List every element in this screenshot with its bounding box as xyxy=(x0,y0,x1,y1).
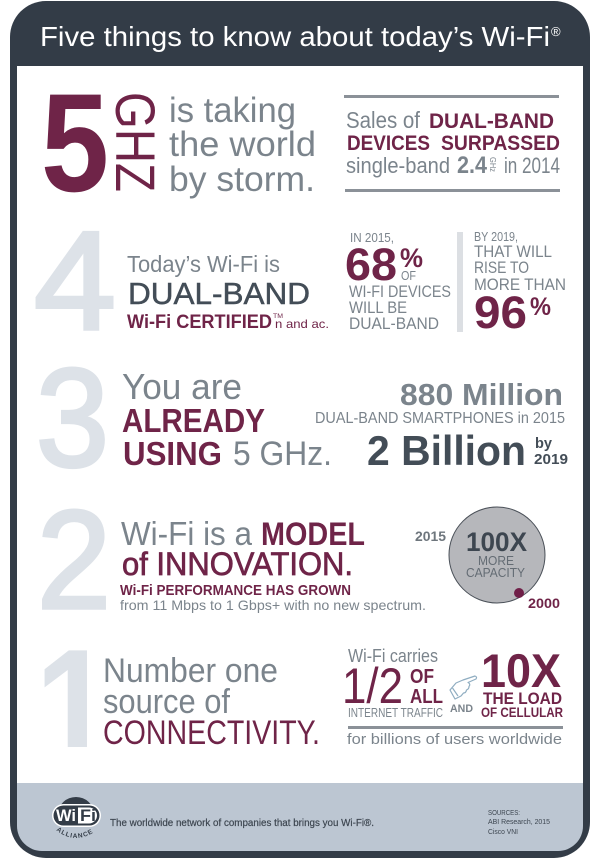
section 4 stat: 96%: RISE TO xyxy=(474,258,529,277)
section 4 stat: 96%: THAT WILL xyxy=(474,242,552,261)
section 1 heading: source of xyxy=(103,683,230,721)
section 2 heading xyxy=(37,481,426,638)
section 2 heading: 2 xyxy=(37,481,111,638)
section 4 stat: 68%: OF xyxy=(401,268,416,283)
and label: AND xyxy=(450,703,473,715)
section 2 heading: from 11 Mbps to 1 Gbps+ with no new spectrum. xyxy=(120,597,426,613)
section 2 heading: MODEL xyxy=(261,516,365,552)
section 1 stat: ten times cellular: THE LOAD xyxy=(483,689,562,708)
section 2 chart: capacity circle xyxy=(415,507,560,611)
section 1 stat: half of internet traffic: OF xyxy=(410,666,434,688)
section 4 heading: Wi-Fi CERTIFIED xyxy=(127,312,272,333)
section 4 stat: 68%: WI-FI DEVICES xyxy=(349,282,451,301)
section 1 heading: Number one xyxy=(103,652,278,690)
icon: Wi-Fi Alliance logo: Wi xyxy=(56,806,76,825)
section 4 stat: 96% xyxy=(474,230,566,338)
section 5 heading: is taking xyxy=(169,91,296,130)
section 5 callout: sales: in 2014 xyxy=(504,153,560,178)
section 1 stat: ten times cellular xyxy=(481,644,563,720)
section 4 heading xyxy=(34,202,329,359)
section 3 heading: USING xyxy=(123,435,222,472)
title: Five things to know about today’s Wi-Fi xyxy=(40,21,550,52)
section 5 callout: sales: Sales of xyxy=(346,107,421,133)
section 2 heading: of INNOVATION. xyxy=(122,546,353,582)
footer sources: SOURCES: xyxy=(488,810,520,817)
section 1 stat: ten times cellular: OF CELLULAR xyxy=(481,704,563,720)
section 3 stats: smartphones: by xyxy=(535,435,553,452)
section 1 stat: half of internet traffic: INTERNET TRAFFIC xyxy=(348,705,443,720)
section 1 stat: half of internet traffic: ALL xyxy=(410,686,443,708)
footer sources xyxy=(488,810,550,836)
section 4 heading: 4 xyxy=(34,202,116,359)
section 5 callout: sales: single-band xyxy=(346,153,450,178)
section 1 stat: half of internet traffic xyxy=(342,646,443,720)
section 5 callout: sales: 2.4 xyxy=(457,152,488,179)
section 1 heading: 1 xyxy=(35,614,113,802)
section 5 heading: the world xyxy=(169,125,316,164)
section 4 stat: 96%: MORE THAN xyxy=(474,275,566,294)
section 3 heading: 3 xyxy=(36,339,109,496)
section 3 stats: smartphones: 2 Billion xyxy=(367,427,526,474)
footer sources: ABI Research, 2015 xyxy=(488,819,550,826)
section 1 stat: half of internet traffic: 1/2 xyxy=(342,658,403,714)
section 5 heading: 5 xyxy=(41,64,109,221)
section 2 chart: capacity circle: 100X xyxy=(466,527,527,557)
icon: Wi-Fi Alliance logo xyxy=(52,797,101,838)
section 4 stat: 68%: % xyxy=(400,243,423,273)
section 2 heading: Wi-Fi PERFORMANCE HAS GROWN xyxy=(120,582,351,599)
section 1 stat: ten times cellular: 10X xyxy=(481,644,561,697)
section 2 chart: capacity circle: 2015 xyxy=(415,529,446,544)
section 1 stat: half of internet traffic: Wi-Fi carries xyxy=(348,646,438,666)
icon: pointing hand xyxy=(450,676,477,699)
section 4 heading: TM xyxy=(273,314,283,320)
section 4 stat: 68%: 68 xyxy=(345,239,397,290)
section 4 stat: 68% xyxy=(345,231,451,333)
section 5 callout: sales xyxy=(344,95,560,192)
section 4 heading: Today’s Wi-Fi is xyxy=(127,251,280,277)
section 4 stat: 68%: DUAL-BAND xyxy=(349,314,439,333)
section 3 heading: 5 GHz. xyxy=(233,435,332,473)
section 4 stat: 96%: % xyxy=(530,293,551,321)
billions of users note: for billions of users worldwide xyxy=(347,731,562,748)
section 5 heading: by storm. xyxy=(169,160,315,199)
section 5 heading: GHZ xyxy=(104,92,167,192)
section 5 callout: sales: DEVICES xyxy=(347,132,430,155)
section 3 stats: smartphones: 880 Million xyxy=(400,377,563,412)
footer sources: Cisco VNI xyxy=(488,829,518,836)
section 4 stat: 96%: 96 xyxy=(474,287,527,338)
section 5 callout: sales: SURPASSED xyxy=(441,132,560,155)
footer tagline: The worldwide network of companies that brings you Wi-Fi®. xyxy=(110,818,374,829)
icon: Wi-Fi Alliance logo: Fi xyxy=(80,806,96,825)
section 5 heading xyxy=(41,64,316,221)
section 5 callout: sales: DUAL-BAND xyxy=(429,110,554,133)
section 4 stat: 96%: BY 2019, xyxy=(474,230,518,244)
section 2 heading: Wi-Fi is a xyxy=(121,515,253,552)
section 2 chart: capacity circle: CAPACITY xyxy=(466,566,526,580)
section 1 heading: CONNECTIVITY. xyxy=(103,714,320,752)
section 3 stats: smartphones: 2019 xyxy=(534,451,568,468)
section 4 stat: 68%: WILL BE xyxy=(349,298,407,317)
icon: Wi-Fi Alliance logo: ALLIANCE xyxy=(56,828,93,838)
section 4 heading: n and ac. xyxy=(275,317,329,331)
section 3 stats: smartphones: DUAL-BAND SMARTPHONES in 2015 xyxy=(315,410,565,427)
section 4 heading: DUAL-BAND xyxy=(128,276,310,311)
section 3 heading: You are xyxy=(122,366,242,407)
section 3 heading: ALREADY xyxy=(122,402,265,439)
section 3 stats: smartphones xyxy=(315,377,568,474)
section 5 callout: sales: GHz xyxy=(488,157,497,172)
section 2 chart: capacity circle: 2000 xyxy=(528,596,560,611)
section 1 heading xyxy=(44,650,318,747)
section 4 stat: 68%: IN 2015, xyxy=(350,231,394,245)
section 2 chart: capacity circle: MORE xyxy=(478,554,514,568)
title: ® xyxy=(551,24,561,39)
section 3 heading xyxy=(36,339,332,496)
